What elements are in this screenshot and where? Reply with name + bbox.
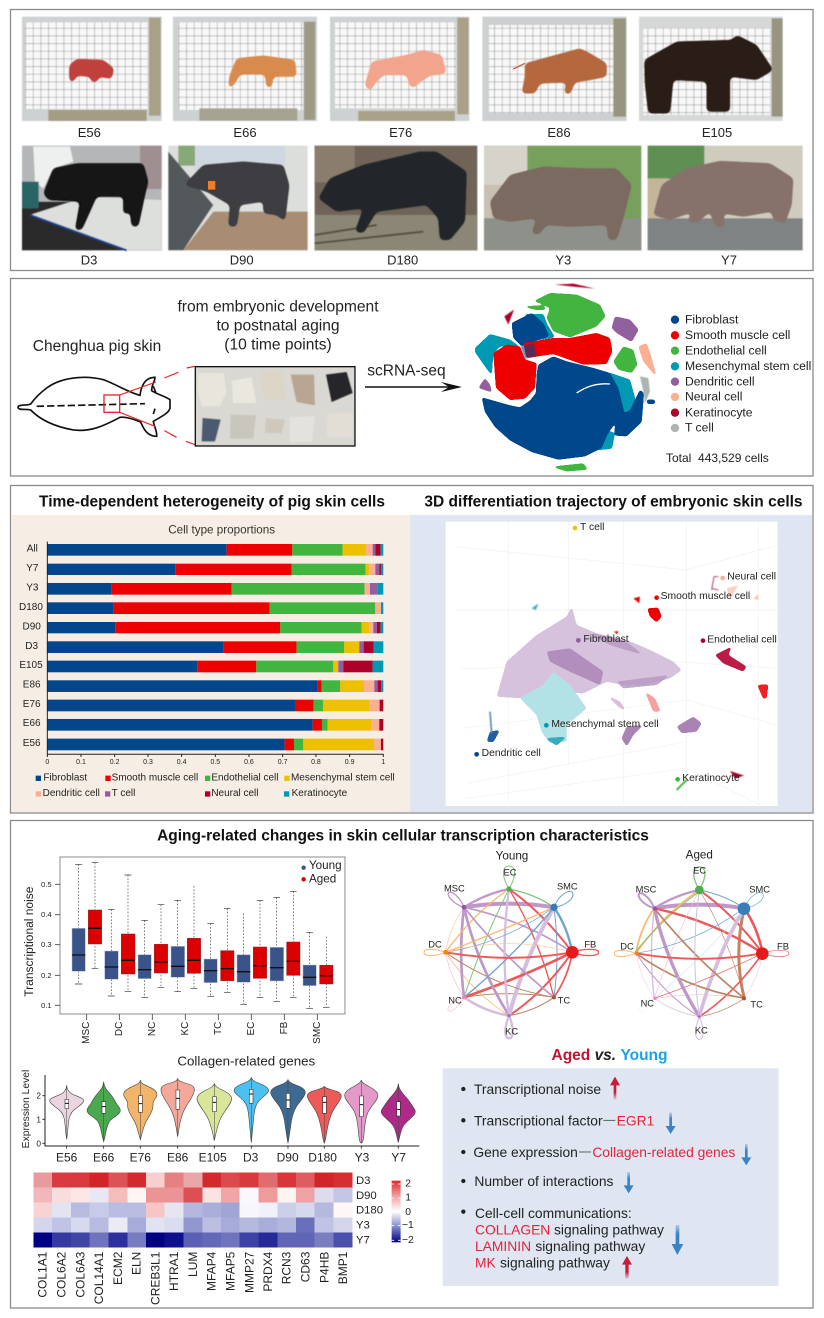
chart: transcriptional noise box plot: Young — [309, 859, 342, 872]
labels: 3D scatter cell types: Keratinocyte — [682, 773, 740, 784]
chart: collagen gene heatmap: CREB3L1 — [148, 1251, 162, 1305]
chart: transcriptional noise box plot: 0.5 — [41, 880, 52, 889]
chart: aged cell-cell communication network: NC — [641, 998, 654, 1008]
photo: E105 fetus on grid — [639, 17, 783, 121]
chart: aged cell-cell communication network — [614, 848, 789, 1039]
item: transcriptional noise up — [461, 1077, 620, 1099]
chart: young cell-cell communication network: FB — [584, 939, 596, 949]
item: cell-cell communications: signaling pathway — [554, 1221, 664, 1237]
photo: D3 piglet on tray — [22, 146, 162, 250]
label: Y3: Y3 — [555, 252, 571, 268]
chart: cell type proportions stacked bars: E56 — [23, 738, 41, 749]
item: cell-cell communications — [461, 1205, 683, 1279]
chart: cell type proportions stacked bars — [19, 523, 385, 766]
item: number of interactions down — [461, 1172, 634, 1193]
chart: collagen gene heatmap: RCN3 — [280, 1251, 294, 1284]
labels: 3D scatter cell types — [474, 522, 777, 784]
chart: collagen gene heatmap: CD63 — [299, 1251, 313, 1282]
label: E56: E56 — [78, 125, 101, 140]
chart: aged cell-cell communication network: SMC — [749, 884, 770, 894]
chart: collagen-related genes violin plot: E105 — [199, 1150, 227, 1164]
chart: collagen-related genes violin plot: E76 — [130, 1150, 151, 1164]
chart: collagen-related genes violin plot: D180 — [308, 1150, 337, 1164]
chart: collagen-related genes violin plot: D90 — [277, 1150, 299, 1164]
chart: cell type proportions stacked bars: E86 — [23, 679, 41, 690]
chart: transcriptional noise box plot: KC — [180, 1022, 191, 1036]
legend: bar chart cell types: T cell — [112, 788, 135, 799]
panel: aged vs young summary — [443, 1068, 779, 1286]
chart: transcriptional noise box plot: EC — [246, 1022, 257, 1036]
photo: D180 pig — [315, 146, 477, 250]
arrow: scRNA-seq: scRNA-seq — [367, 362, 446, 380]
chart: aged cell-cell communication network: MSC — [636, 884, 657, 894]
chart: collagen gene heatmap: MFAP4 — [205, 1251, 219, 1291]
label: Chenghua pig skin: Chenghua pig skin — [33, 338, 161, 355]
labels: 3D scatter cell types: Smooth muscle cell — [661, 591, 750, 602]
chart: collagen gene heatmap: ELN — [130, 1252, 144, 1275]
photo: E76 fetus on grid — [330, 17, 469, 121]
legend: cell types: Neural cell — [685, 390, 742, 404]
legend: cell types: Dendritic cell — [685, 374, 755, 388]
chart: collagen-related genes violin plot: D3 — [243, 1150, 259, 1164]
chart: cell type proportions stacked bars: 0 — [45, 759, 49, 766]
item: cell-cell communications: LAMININ — [475, 1238, 531, 1254]
label: E86: E86 — [547, 125, 571, 140]
panel: experimental overview — [10, 278, 813, 476]
chart: young cell-cell communication network: TC — [558, 995, 570, 1005]
arrow: scRNA-seq — [365, 362, 462, 392]
chart: young cell-cell communication network: MSC — [444, 883, 465, 893]
legend: cell types: T cell — [685, 421, 714, 435]
chart: 3D differentiation trajectory scatter — [446, 522, 778, 806]
panel: time-dependent cell composition and trajectory — [10, 486, 813, 813]
chart: UMAP of cell types — [475, 284, 657, 471]
chart: cell type proportions stacked bars: Y3 — [26, 582, 39, 593]
chart: cell type proportions stacked bars: E105 — [19, 660, 43, 671]
chart: collagen-related genes violin plot: Expression Level — [21, 1070, 32, 1148]
chart: transcriptional noise box plot: TC — [213, 1022, 224, 1035]
legend: bar chart cell types: Mesenchymal stem cell — [291, 772, 395, 783]
labels: 3D scatter cell types: Dendritic cell — [482, 748, 541, 759]
chart: collagen gene heatmap: LUM — [186, 1252, 200, 1277]
labels: 3D scatter cell types: Endothelial cell — [707, 634, 777, 645]
item: cell-cell communications: signaling pathway — [535, 1238, 645, 1254]
chart: collagen gene heatmap — [33, 1173, 414, 1305]
heading: 3D differentiation trajectory: 3D differentiation trajectory of embryonic skin cells — [424, 494, 803, 510]
item: transcriptional noise up: Transcriptional noise — [474, 1081, 601, 1097]
chart: collagen gene heatmap: D3 — [356, 1175, 370, 1187]
chart: transcriptional noise box plot — [22, 857, 345, 1044]
chart: transcriptional noise box plot: SMC — [312, 1022, 323, 1044]
photo: E56 fetus on grid — [22, 17, 162, 121]
label: D180: D180 — [387, 252, 418, 268]
chart: transcriptional noise box plot: NC — [147, 1022, 158, 1036]
chart: cell type proportions stacked bars: 0.7 — [278, 759, 288, 766]
photo: Y7 pig — [648, 146, 803, 250]
chart: cell type proportions stacked bars: Cell type proportions — [168, 523, 275, 536]
chart: transcriptional noise box plot: 0.2 — [41, 971, 52, 980]
photo: skin tissue samples — [195, 367, 355, 446]
chart: young cell-cell communication network: KC — [505, 1027, 518, 1037]
chart: cell type proportions stacked bars: 1 — [381, 759, 385, 766]
label: E105: E105 — [702, 125, 732, 140]
text: total cell count: Total 443,529 cells — [666, 451, 769, 465]
chart: aged cell-cell communication network: TC — [750, 1000, 763, 1010]
chart: collagen gene heatmap: 0 — [405, 1207, 411, 1218]
label: E76: E76 — [389, 125, 412, 140]
item: EGR1 down: EGR1 — [617, 1112, 655, 1128]
chart: cell type proportions stacked bars: 0.8 — [311, 759, 321, 766]
chart: collagen gene heatmap: BMP1 — [336, 1251, 350, 1284]
chart: collagen gene heatmap: ECM2 — [111, 1251, 125, 1285]
chart: aged cell-cell communication network: KC — [695, 1025, 708, 1035]
chart: transcriptional noise box plot: FB — [279, 1021, 290, 1034]
label: Y7: Y7 — [721, 252, 737, 268]
chart: collagen-related genes violin plot: E86 — [167, 1150, 189, 1164]
chart: transcriptional noise box plot: 0.4 — [41, 910, 52, 919]
chart: cell type proportions stacked bars: 0.2 — [110, 759, 120, 766]
legend: bar chart cell types: Dendritic cell — [43, 788, 100, 799]
chart: cell type proportions stacked bars: E76 — [23, 699, 41, 710]
chart: collagen gene heatmap: −1 — [402, 1220, 414, 1231]
chart: cell type proportions stacked bars: 0.1 — [76, 759, 86, 766]
chart: cell type proportions stacked bars: D90 — [23, 621, 41, 632]
chart: transcriptional noise box plot: MSC — [81, 1022, 92, 1044]
legend: cell types: Keratinocyte — [685, 405, 753, 419]
chart: transcriptional noise box plot: DC — [114, 1022, 125, 1036]
chart: cell type proportions stacked bars: 0.4 — [177, 759, 187, 766]
panel: pig growth photographs — [10, 10, 813, 270]
text: sampling description: from embryonic development — [177, 298, 379, 316]
legend: bar chart cell types: Keratinocyte — [292, 788, 348, 799]
chart: young cell-cell communication network: NC — [448, 995, 462, 1005]
chart: collagen gene heatmap: 2 — [405, 1178, 411, 1189]
chart: aged cell-cell communication network: DC — [620, 941, 634, 951]
labels: 3D scatter cell types: T cell — [580, 522, 604, 533]
item: collagen-related genes down: Gene expression — [473, 1144, 578, 1160]
chart: collagen-related genes violin plot: E56 — [56, 1150, 78, 1164]
chart: cell type proportions stacked bars: Y7 — [26, 563, 39, 574]
item: cell-cell communications: Cell-cell communications: — [475, 1205, 632, 1221]
chart: aged cell-cell communication network: EC — [693, 866, 706, 876]
label: E66: E66 — [233, 125, 257, 140]
chart: transcriptional noise box plot: Aged — [309, 872, 336, 885]
chart: collagen gene heatmap: Y7 — [356, 1234, 370, 1246]
legend: bar chart cell types — [36, 772, 395, 799]
legend: cell types: Fibroblast — [685, 312, 739, 326]
chart: young cell-cell communication network: DC — [428, 940, 442, 950]
text: sampling description — [177, 298, 379, 354]
text: sampling description: (10 time points) — [224, 336, 332, 354]
legend: cell types: Endothelial cell — [685, 343, 767, 357]
heading: Aged vs. Young: Aged vs. Young — [552, 1046, 668, 1064]
legend: bar chart cell types: Fibroblast — [43, 772, 87, 783]
chart: transcriptional noise box plot: Transcriptional noise — [22, 886, 36, 997]
chart: young cell-cell communication network: EC — [504, 868, 517, 878]
item: cell-cell communications: COLLAGEN — [475, 1221, 550, 1237]
chart: collagen gene heatmap: COL1A1 — [36, 1251, 50, 1298]
chart: cell type proportions stacked bars: All — [27, 543, 38, 554]
panel: aging-related changes — [10, 820, 813, 1308]
photo: Y3 pig — [484, 146, 641, 250]
icon: pig outline with sampling area — [18, 366, 195, 445]
item: collagen-related genes down: Collagen-related genes — [592, 1144, 735, 1160]
photo: D90 pig — [168, 146, 308, 250]
labels: 3D scatter cell types: Neural cell — [727, 571, 776, 582]
item: EGR1 down: Transcriptional factor — [474, 1112, 603, 1128]
chart: cell type proportions stacked bars: 0.5 — [210, 759, 220, 766]
chart: collagen gene heatmap: MFAP5 — [223, 1251, 237, 1291]
legend: bar chart cell types: Endothelial cell — [211, 772, 278, 783]
photo: E66 fetus on grid — [173, 17, 317, 121]
chart: aged cell-cell communication network: FB — [777, 942, 789, 952]
chart: cell type proportions stacked bars: 0.6 — [244, 759, 254, 766]
chart: cell type proportions stacked bars: 0.3 — [143, 759, 153, 766]
chart: young cell-cell communication network: SMC — [557, 882, 578, 892]
chart: young cell-cell communication network: Young — [496, 849, 528, 862]
item: cell-cell communications: signaling pathway — [500, 1255, 610, 1271]
chart: collagen gene heatmap: PRDX4 — [261, 1251, 275, 1292]
label: D90: D90 — [230, 252, 254, 268]
chart: cell type proportions stacked bars: E66 — [23, 718, 41, 729]
chart: collagen gene heatmap: HTRA1 — [167, 1251, 181, 1291]
legend: bar chart cell types: Neural cell — [211, 788, 258, 799]
chart: collagen gene heatmap: Y3 — [356, 1219, 370, 1231]
heading: time-dependent heterogeneity: Time-dependent heterogeneity of pig skin cells — [39, 494, 385, 510]
chart: collagen-related genes violin plot — [21, 1053, 419, 1164]
chart: collagen gene heatmap: D180 — [356, 1205, 383, 1217]
chart: collagen gene heatmap: COL6A2 — [55, 1251, 69, 1298]
label: D3: D3 — [81, 252, 97, 268]
chart: cell type proportions stacked bars: 0.9 — [345, 759, 355, 766]
legend: cell types: Mesenchymal stem cell — [685, 359, 811, 373]
chart: collagen gene heatmap: 1 — [405, 1192, 411, 1203]
chart: transcriptional noise box plot: 0.3 — [41, 940, 52, 949]
chart: collagen gene heatmap: COL14A1 — [92, 1251, 106, 1304]
photo: E86 fetus on grid — [482, 17, 627, 121]
chart: collagen gene heatmap: P4HB — [317, 1252, 331, 1283]
item: EGR1 down — [461, 1112, 676, 1134]
chart: transcriptional noise box plot: 0.1 — [41, 1001, 52, 1010]
text: sampling description: to postnatal aging — [216, 318, 340, 334]
labels: 3D scatter cell types: Fibroblast — [583, 634, 629, 645]
chart: collagen-related genes violin plot: Y7 — [391, 1150, 406, 1164]
chart: collagen-related genes violin plot: 0 — [36, 1138, 41, 1148]
chart: collagen-related genes violin plot: E66 — [93, 1150, 115, 1164]
chart: collagen gene heatmap: COL6A3 — [73, 1251, 87, 1298]
chart: collagen-related genes violin plot: Y3 — [355, 1150, 370, 1164]
legend: cell types: Smooth muscle cell — [685, 328, 790, 342]
chart: cell type proportions stacked bars: D180 — [19, 602, 43, 613]
chart: collagen gene heatmap: −2 — [402, 1235, 414, 1246]
chart: collagen gene heatmap: MMP27 — [242, 1251, 256, 1293]
chart: collagen-related genes violin plot: 1 — [36, 1114, 41, 1124]
legend: bar chart cell types: Smooth muscle cell — [112, 772, 198, 783]
chart: collagen-related genes violin plot: Collagen-related genes — [177, 1053, 316, 1068]
chart: cell type proportions stacked bars: D3 — [25, 641, 38, 652]
item: number of interactions down: Number of interactions — [474, 1173, 614, 1189]
chart: young cell-cell communication network — [424, 849, 599, 1038]
item: collagen-related genes down — [461, 1144, 751, 1165]
labels: 3D scatter cell types: Mesenchymal stem cell — [551, 719, 659, 730]
item: cell-cell communications: MK — [475, 1255, 497, 1271]
heading: aging-related changes: Aging-related changes in skin cellular transcription characteristics — [157, 828, 649, 844]
chart: aged cell-cell communication network: Aged — [686, 848, 713, 861]
chart: collagen-related genes violin plot: 2 — [36, 1091, 41, 1101]
chart: collagen gene heatmap: D90 — [356, 1190, 377, 1202]
legend: cell types — [671, 312, 811, 435]
